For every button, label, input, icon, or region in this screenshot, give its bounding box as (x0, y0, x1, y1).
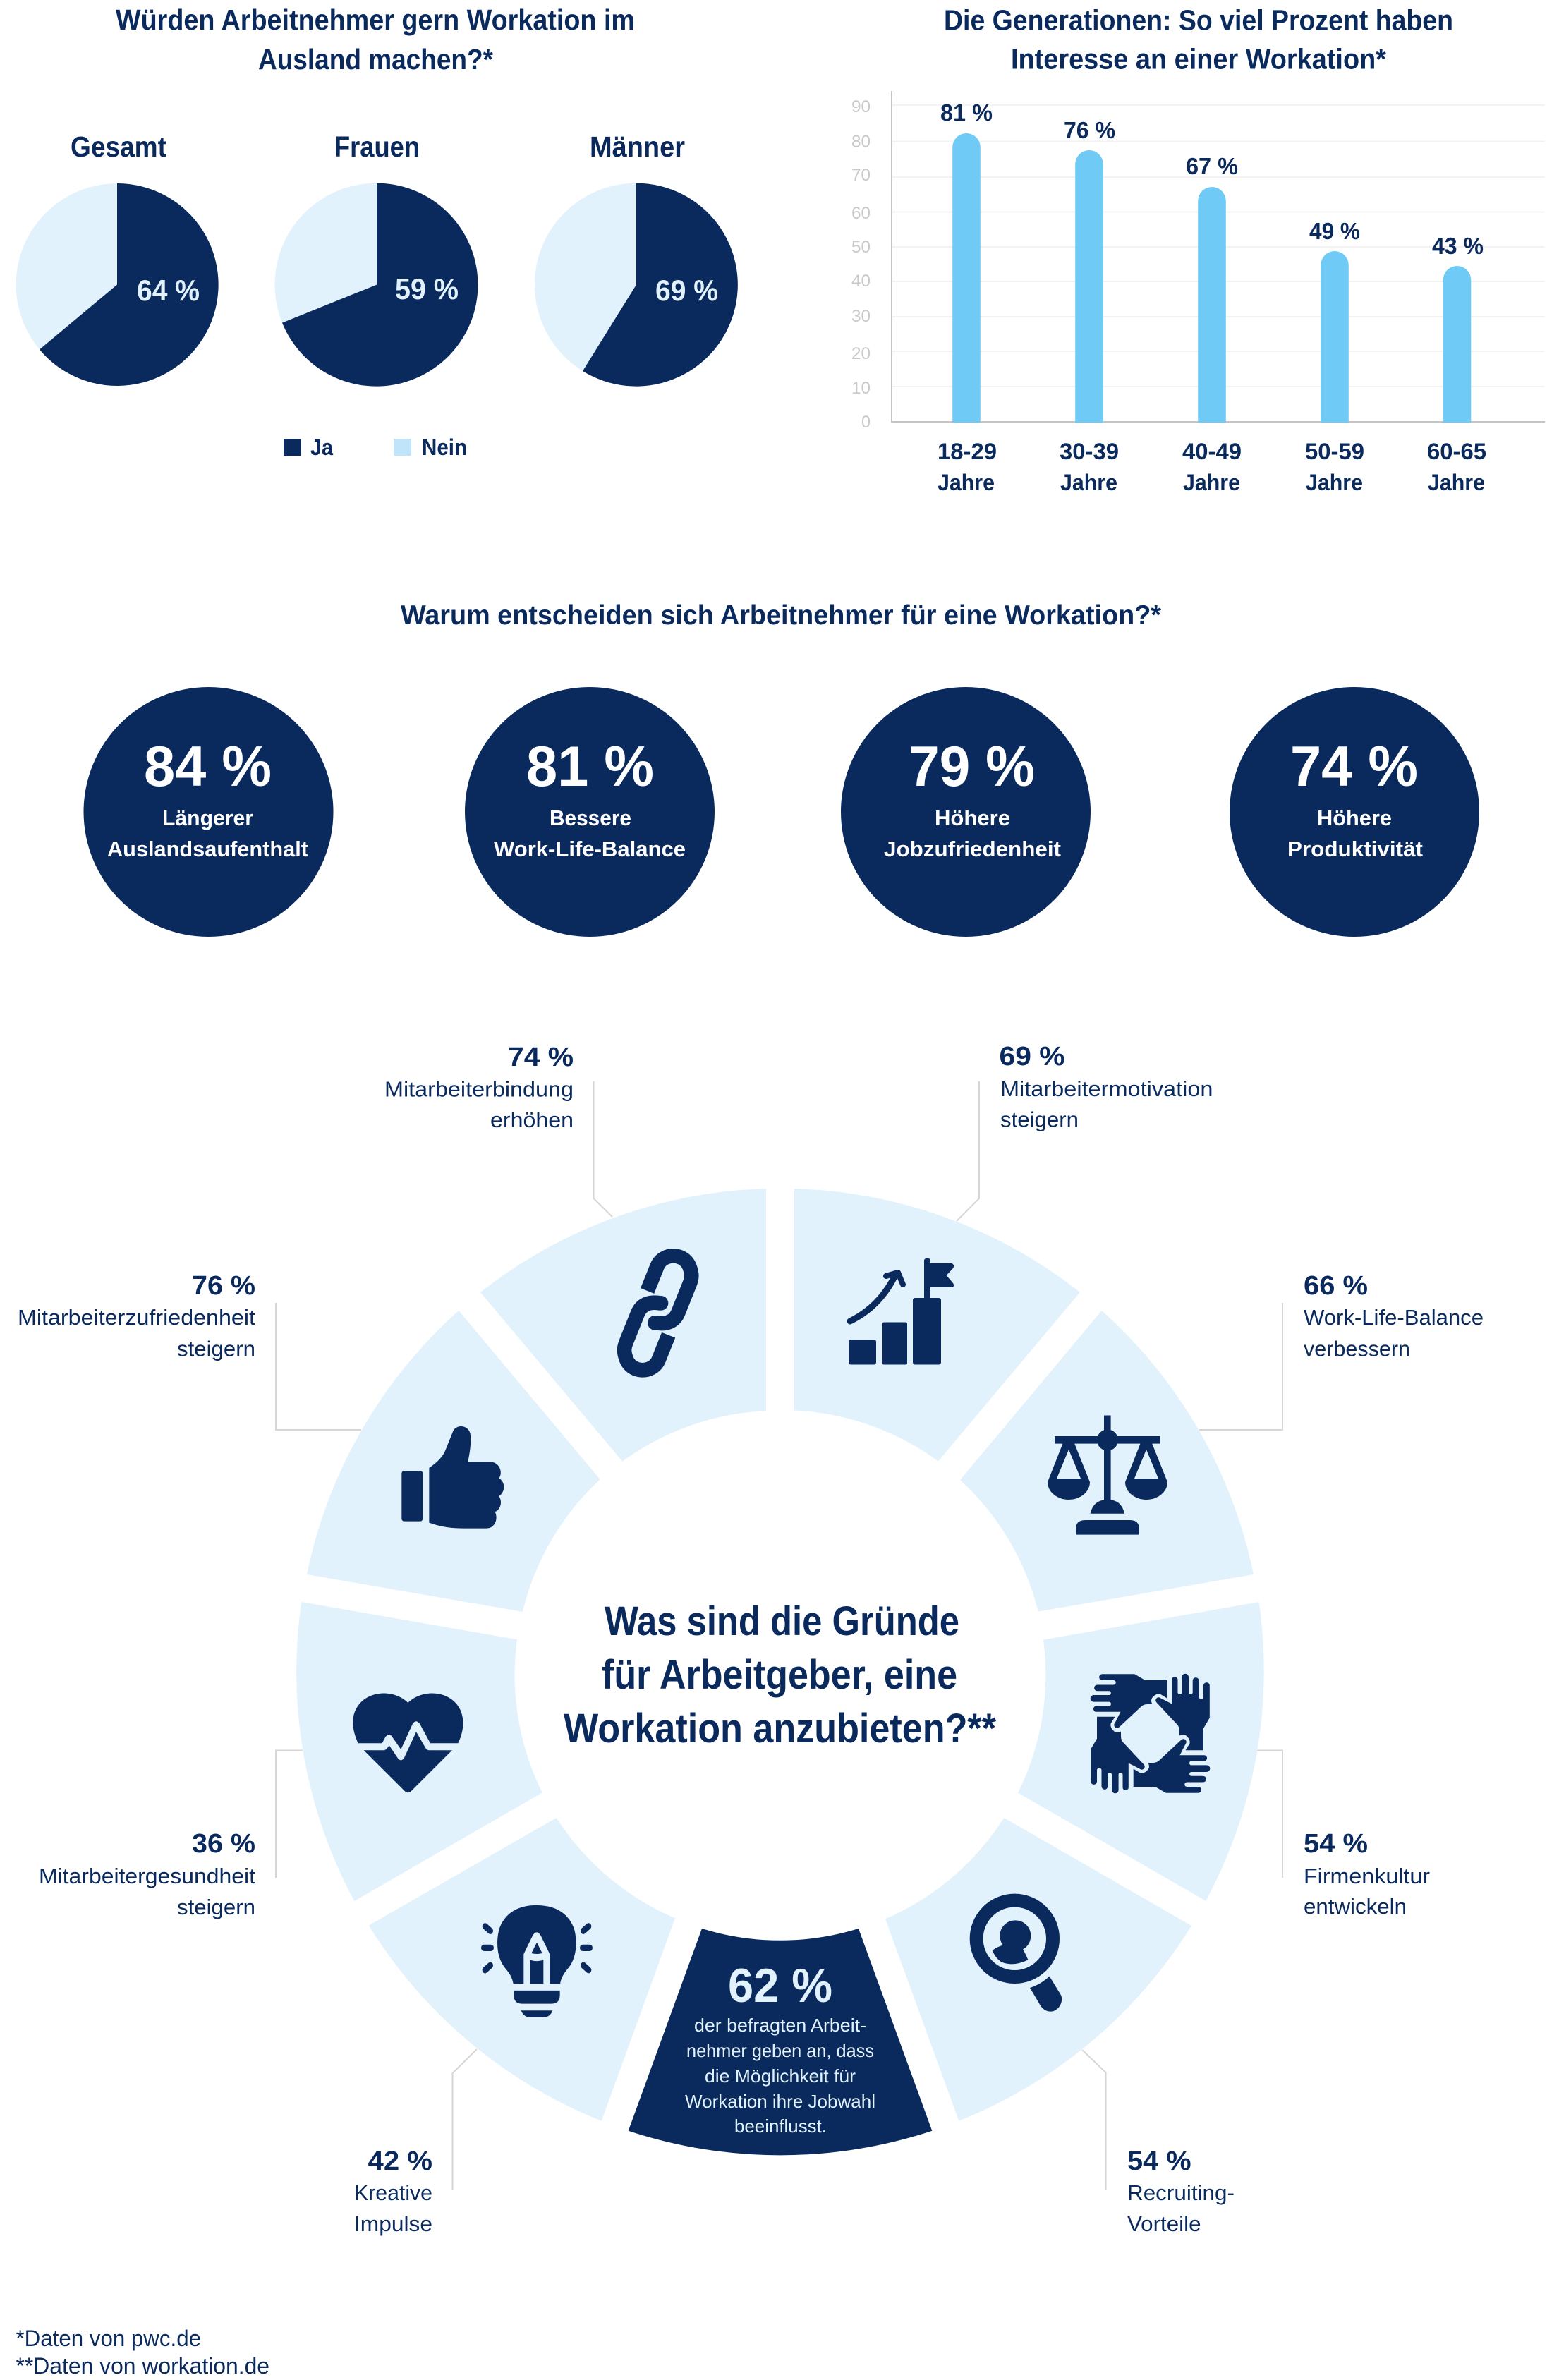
chart grid and axes: 10 (851, 379, 871, 398)
bar 50-59: Jahre (1306, 470, 1363, 495)
chart grid and axes: 50 (851, 238, 871, 257)
label: 76 % Mitarbeiterzufriedenheit (18, 1271, 255, 1361)
pie: Frauen: Frauen (334, 130, 420, 163)
heading: reasons: Warum entscheiden sich Arbeitnehmer für eine Workation?* (401, 600, 1162, 631)
bar 40-49: Jahre (1183, 470, 1240, 495)
label: 42 % Kreative Impulse: Impulse (354, 2211, 432, 2236)
label: 36 % Mitarbeitergesundheit: 36 % (192, 1829, 255, 1859)
circle: 84 %: Auslandsaufenthalt (107, 837, 308, 861)
icon: heart with pulse (353, 1693, 463, 1792)
chart grid and axes: 20 (851, 344, 871, 363)
circle: 84 % (83, 687, 333, 937)
bar 18-29: Jahre (938, 470, 995, 495)
circle: 81 %: Work-Life-Balance (494, 837, 686, 861)
label: 76 % Mitarbeiterzufriedenheit: 76 % (192, 1271, 255, 1301)
bar 18-29: 18-29 (938, 439, 997, 464)
segment: heart (296, 1602, 542, 1901)
bar 30-39 (1060, 117, 1119, 495)
footnotes (16, 2326, 269, 2379)
icon: balance scale (1048, 1415, 1167, 1535)
label: 74 % Mitarbeiterbindung: Mitarbeiterbindung (384, 1076, 574, 1101)
circle: 81 %: Bessere (550, 806, 631, 830)
pie: Männer (535, 130, 738, 387)
footnotes: *Daten von pwc.de (16, 2326, 201, 2351)
bar 50-59 (1305, 218, 1364, 495)
panel: bar chart generations (851, 4, 1545, 495)
label: 36 % Mitarbeitergesundheit: steigern (177, 1895, 255, 1919)
heading: pie charts (116, 4, 635, 75)
icon: growth chart with flag (849, 1258, 954, 1364)
circle: 74 %: Höhere (1317, 806, 1392, 830)
segment: highlight 62 %: nehmer geben an, dass (686, 2040, 874, 2061)
segment: hands (1018, 1602, 1264, 1901)
footnotes: **Daten von workation.de (16, 2353, 269, 2379)
bar 50-59: 50-59 (1305, 439, 1364, 464)
circle: 74 % (1230, 687, 1479, 937)
circle: 84 %: 84 % (144, 735, 272, 799)
center heading (564, 1598, 996, 1751)
icon: four hands (1091, 1674, 1210, 1793)
segment: highlight 62 %: der befragten Arbeit- (694, 2015, 866, 2036)
label: 54 % Firmenkultur: entwickeln (1304, 1894, 1407, 1919)
circle: 79 %: Höhere (935, 806, 1010, 830)
label: 66 % Work-Life-Balance: 66 % (1304, 1271, 1368, 1301)
circle: 74 %: Produktivität (1287, 837, 1423, 861)
pie: Frauen (274, 130, 478, 387)
heading: pie charts: Ausland machen?* (258, 43, 493, 75)
label: 42 % Kreative Impulse: Kreative (354, 2180, 432, 2205)
circle: 84 %: Längerer (162, 806, 253, 830)
label: 76 % Mitarbeiterzufriedenheit: steigern (177, 1337, 255, 1361)
bar 30-39: 30-39 (1060, 439, 1119, 464)
label: 76 % Mitarbeiterzufriedenheit: Mitarbeiterzufriedenheit (18, 1305, 255, 1330)
segment: scales (960, 1311, 1254, 1612)
center heading: Workation anzubieten?** (564, 1706, 996, 1751)
bar 40-49: 67 % (1186, 153, 1238, 179)
chart grid and axes: 60 (851, 204, 871, 223)
circle: 79 % (841, 687, 1091, 937)
segment: link (480, 1189, 766, 1462)
segment: highlight 62 %: Workation ihre Jobwahl (685, 2091, 875, 2112)
label: 69 % Mitarbeitermotivation (999, 1042, 1213, 1132)
label: 74 % Mitarbeiterbindung: erhöhen (490, 1107, 574, 1132)
segment: chart (794, 1189, 1080, 1462)
circle: 81 % (465, 687, 715, 937)
segment: thumb (307, 1311, 600, 1612)
label: 74 % Mitarbeiterbindung: 74 % (508, 1043, 574, 1072)
center heading: für Arbeitgeber, eine (602, 1652, 957, 1698)
label: 54 % Firmenkultur (1304, 1829, 1430, 1919)
label: 54 % Recruiting-Vorteile: Vorteile (1127, 2211, 1201, 2236)
label: 69 % Mitarbeitermotivation: Mitarbeitermotivation (1000, 1076, 1213, 1101)
label: 42 % Kreative Impulse: 42 % (368, 2147, 432, 2176)
segment: highlight 62 %: beeinflusst. (734, 2115, 827, 2137)
chart grid and axes: 80 (851, 133, 871, 151)
heading: generations: Interesse an einer Workation* (1011, 43, 1386, 75)
heading: generations (944, 4, 1453, 75)
chart grid and axes: 70 (851, 166, 871, 185)
pie: Männer: Männer (590, 130, 685, 163)
chart grid and axes: 40 (851, 272, 871, 291)
legend (284, 435, 467, 460)
label: 69 % Mitarbeitermotivation: 69 % (999, 1042, 1065, 1071)
label: 69 % Mitarbeitermotivation: steigern (1000, 1107, 1079, 1132)
legend: Nein (422, 435, 467, 460)
label: 54 % Recruiting-Vorteile (1127, 2147, 1235, 2236)
segment: highlight 62 % (629, 1929, 932, 2155)
icon: light bulb with pencil (484, 1905, 590, 2017)
icon: magnifier with person (976, 1900, 1062, 2012)
bar 18-29: 81 % (940, 99, 993, 126)
segment: highlight 62 %: die Möglichkeit für (705, 2065, 856, 2087)
panel: employer reasons ring (18, 1042, 1484, 2236)
heading: pie charts: Würden Arbeitnehmer gern Workation im (116, 4, 635, 36)
chart grid and axes: 90 (851, 97, 871, 116)
segment: magnifier (885, 1818, 1191, 2121)
segment: highlight 62 %: 62 % (728, 1959, 832, 2012)
pie: Gesamt: 64 % (137, 274, 200, 307)
panel: reasons of employees (83, 600, 1479, 937)
label: 42 % Kreative Impulse (354, 2147, 432, 2236)
label: 36 % Mitarbeitergesundheit (39, 1829, 255, 1919)
bar 60-65: 60-65 (1427, 439, 1486, 464)
segment: bulb (369, 1818, 675, 2121)
chart grid and axes: 0 (861, 413, 871, 432)
label: 54 % Firmenkultur: 54 % (1304, 1829, 1368, 1859)
chart grid and axes (851, 91, 1545, 432)
chart grid and axes: 30 (851, 307, 871, 326)
icon: chain link (624, 1256, 691, 1370)
bar 50-59: 49 % (1309, 218, 1360, 244)
pie: Gesamt (16, 130, 219, 386)
label: 54 % Firmenkultur: Firmenkultur (1304, 1864, 1430, 1888)
bar 60-65: Jahre (1428, 470, 1485, 495)
icon: thumbs up (401, 1426, 504, 1529)
pie: Gesamt: Gesamt (71, 130, 166, 163)
circle: 81 %: 81 % (526, 735, 654, 799)
bar 30-39: Jahre (1060, 470, 1117, 495)
bar 40-49: 40-49 (1182, 439, 1242, 464)
legend: Ja (310, 435, 333, 460)
bar 40-49 (1182, 153, 1242, 495)
bar 60-65: 43 % (1432, 233, 1484, 259)
bar 60-65 (1427, 233, 1486, 495)
circle: 79 %: Jobzufriedenheit (884, 837, 1061, 861)
label: 74 % Mitarbeiterbindung (384, 1043, 574, 1132)
circle: 74 %: 74 % (1290, 735, 1418, 799)
label: 54 % Recruiting-Vorteile: Recruiting- (1127, 2180, 1235, 2205)
label: 54 % Recruiting-Vorteile: 54 % (1127, 2147, 1191, 2176)
bar 30-39: 76 % (1064, 117, 1115, 143)
connector lines (276, 1081, 1282, 2190)
label: 66 % Work-Life-Balance: verbessern (1304, 1337, 1410, 1361)
bar 18-29 (938, 99, 997, 495)
pie: Männer: 69 % (655, 274, 718, 307)
panel: pie charts abroad workation (16, 4, 738, 460)
center heading: Was sind die Gründe (605, 1598, 959, 1644)
heading: generations: Die Generationen: So viel Prozent haben (944, 4, 1453, 37)
label: 66 % Work-Life-Balance: Work-Life-Balance (1304, 1305, 1484, 1330)
label: 36 % Mitarbeitergesundheit: Mitarbeitergesundheit (39, 1864, 255, 1888)
label: 66 % Work-Life-Balance (1304, 1271, 1484, 1361)
pie: Frauen: 59 % (395, 272, 459, 305)
circle: 79 %: 79 % (909, 735, 1035, 799)
